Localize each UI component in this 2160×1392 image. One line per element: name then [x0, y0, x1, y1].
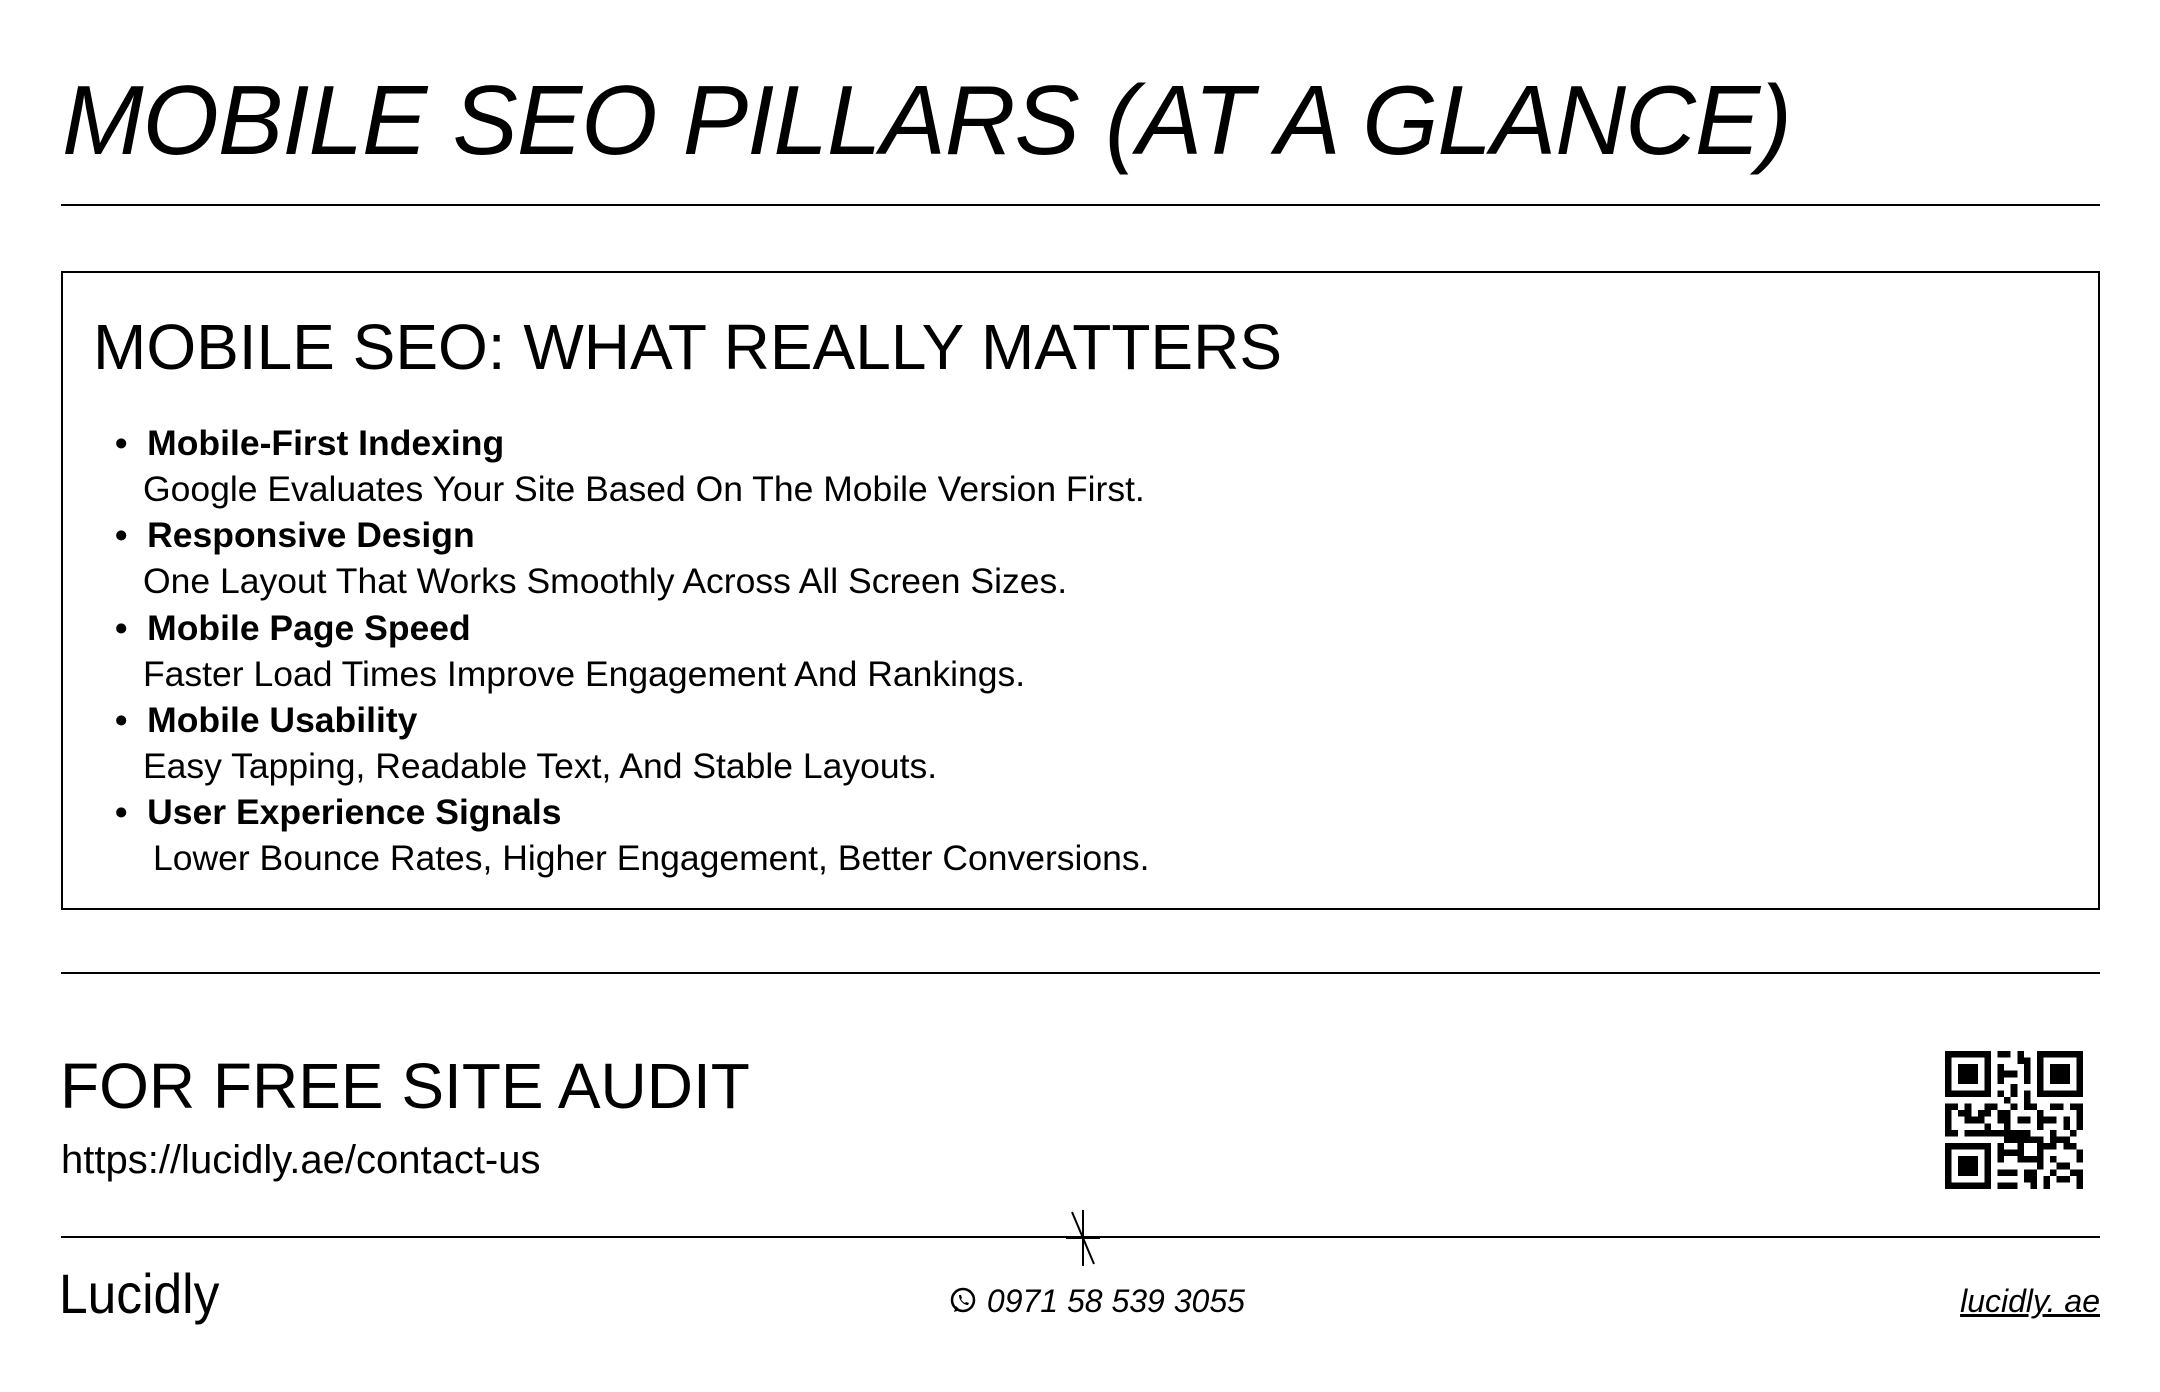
- bullet list: Google Evaluates Your Site Based On The Mobile Version First.: [143, 469, 1145, 509]
- qr code: [1945, 1051, 2083, 1189]
- bullet list: • Mobile-First Indexing: [115, 423, 504, 463]
- logo: Lucidly: [59, 1262, 219, 1325]
- bullet list: Faster Load Times Improve Engagement And Rankings.: [143, 654, 1025, 694]
- bullet list: One Layout That Works Smoothly Across All Screen Sizes.: [143, 561, 1067, 601]
- panel heading: MOBILE SEO: WHAT REALLY MATTERS: [93, 311, 1282, 383]
- bullet list: Lower Bounce Rates, Higher Engagement, Better Conversions.: [153, 838, 1150, 878]
- icon: whatsapp: [950, 1288, 976, 1312]
- panel: what really matters: [61, 271, 2100, 910]
- website link: lucidly. ae: [1960, 1283, 2100, 1319]
- cta heading: FOR FREE SITE AUDIT: [60, 1050, 750, 1122]
- icon: sparkle star: [1066, 1210, 1100, 1266]
- bullet list: • Mobile Usability: [115, 700, 417, 740]
- title: MOBILE SEO PILLARS (AT A GLANCE): [62, 65, 1791, 175]
- bullet list: Easy Tapping, Readable Text, And Stable Layouts.: [143, 746, 937, 786]
- bullet list: • Responsive Design: [115, 515, 475, 555]
- cta url: https://lucidly.ae/contact-us: [61, 1138, 540, 1182]
- bullet list: [115, 423, 1150, 878]
- contact phone: 0971 58 539 3055: [987, 1283, 1245, 1319]
- bullet list: • Mobile Page Speed: [115, 608, 471, 648]
- bullet list: • User Experience Signals: [115, 792, 562, 832]
